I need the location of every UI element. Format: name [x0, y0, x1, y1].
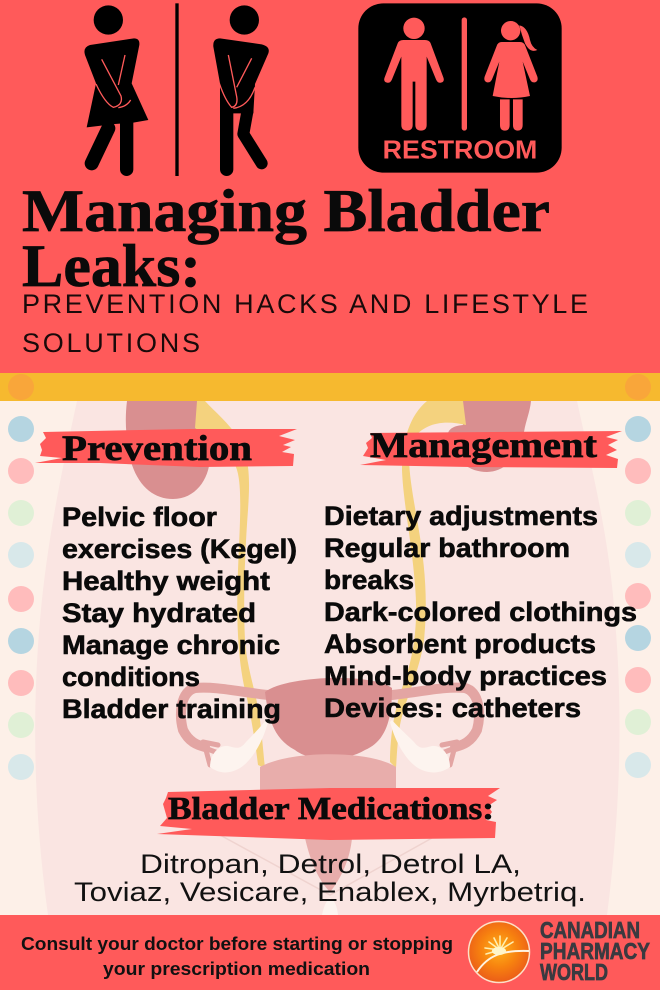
management list: Dietary adjustments	[324, 501, 598, 531]
left dots column	[8, 416, 34, 780]
body silhouette background	[35, 401, 620, 915]
medications heading: Bladder Medications:	[168, 790, 494, 826]
anatomy: lower canal	[305, 838, 352, 892]
anatomy: right fallopian tube	[392, 688, 479, 765]
medications list: Toviaz, Vesicare, Enablex, Myrbetriq.	[74, 877, 586, 907]
management heading: Management	[370, 425, 597, 465]
anatomy: right kidney	[448, 401, 531, 472]
management heading banner	[360, 431, 622, 468]
prevention list: Manage chronic	[62, 630, 280, 660]
subtitle	[22, 289, 588, 358]
footer disclaimer	[21, 933, 453, 979]
logo wordmark	[540, 917, 650, 985]
management list: Devices: catheters	[324, 693, 581, 723]
title: Leaks:	[22, 233, 201, 299]
medications heading banner	[157, 788, 500, 840]
management list	[324, 501, 637, 723]
footer disclaimer: your prescription medication	[103, 958, 370, 979]
header panel	[0, 0, 660, 373]
divider	[175, 3, 179, 176]
anatomy: left kidney	[126, 401, 210, 499]
footer panel	[0, 915, 660, 990]
anatomy: bottom highlight	[322, 898, 338, 915]
subtitle: SOLUTIONS	[22, 328, 200, 358]
prevention list: Pelvic floor	[62, 502, 218, 532]
anatomy: left ovary	[210, 720, 268, 772]
management list: Dark-colored clothings	[324, 597, 637, 627]
management list: Mind-body practices	[324, 661, 607, 691]
management list: Absorbent products	[324, 629, 596, 659]
title	[22, 178, 550, 299]
anatomy: left ureter	[195, 401, 265, 768]
prevention list: exercises (Kegel)	[62, 534, 297, 564]
logo wordmark: WORLD	[540, 959, 608, 985]
management list: breaks	[324, 565, 414, 595]
logo mark	[468, 922, 530, 982]
icons: figures and restroom sign	[84, 3, 562, 176]
anatomy: vaginal canal	[260, 754, 396, 800]
icon: restroom sign: RESTROOM	[383, 134, 537, 164]
subtitle: PREVENTION HACKS AND LIFESTYLE	[22, 289, 588, 319]
medications list: Ditropan, Detrol, Detrol LA,	[140, 849, 521, 879]
anatomy: left fallopian tube	[181, 688, 268, 765]
anatomy: thin lines	[220, 835, 432, 895]
panel: bladder medications	[74, 788, 586, 907]
anatomy: right ovary	[390, 720, 450, 772]
icon: woman crossing legs	[84, 5, 148, 169]
prevention heading: Prevention	[62, 428, 252, 468]
icon: man crossing legs	[213, 5, 269, 169]
prevention list: conditions	[62, 662, 200, 692]
prevention list: Bladder training	[62, 694, 281, 724]
right dots column	[625, 416, 651, 778]
title: Managing Bladder	[22, 178, 550, 244]
prevention list: Stay hydrated	[62, 598, 256, 628]
logo wordmark: CANADIAN	[540, 917, 640, 943]
yellow band	[0, 373, 660, 401]
panel: management	[324, 425, 637, 723]
panel: prevention	[35, 428, 297, 724]
anatomy: uterus	[265, 678, 392, 759]
footer disclaimer: Consult your doctor before starting or stopping	[21, 933, 453, 954]
prevention heading banner	[35, 429, 297, 467]
prevention list: Healthy weight	[62, 566, 270, 596]
anatomy: right ureter	[390, 401, 466, 768]
medications list	[74, 849, 586, 907]
management list: Regular bathroom	[324, 533, 570, 563]
icon: restroom sign	[358, 3, 562, 173]
prevention list	[62, 502, 297, 724]
